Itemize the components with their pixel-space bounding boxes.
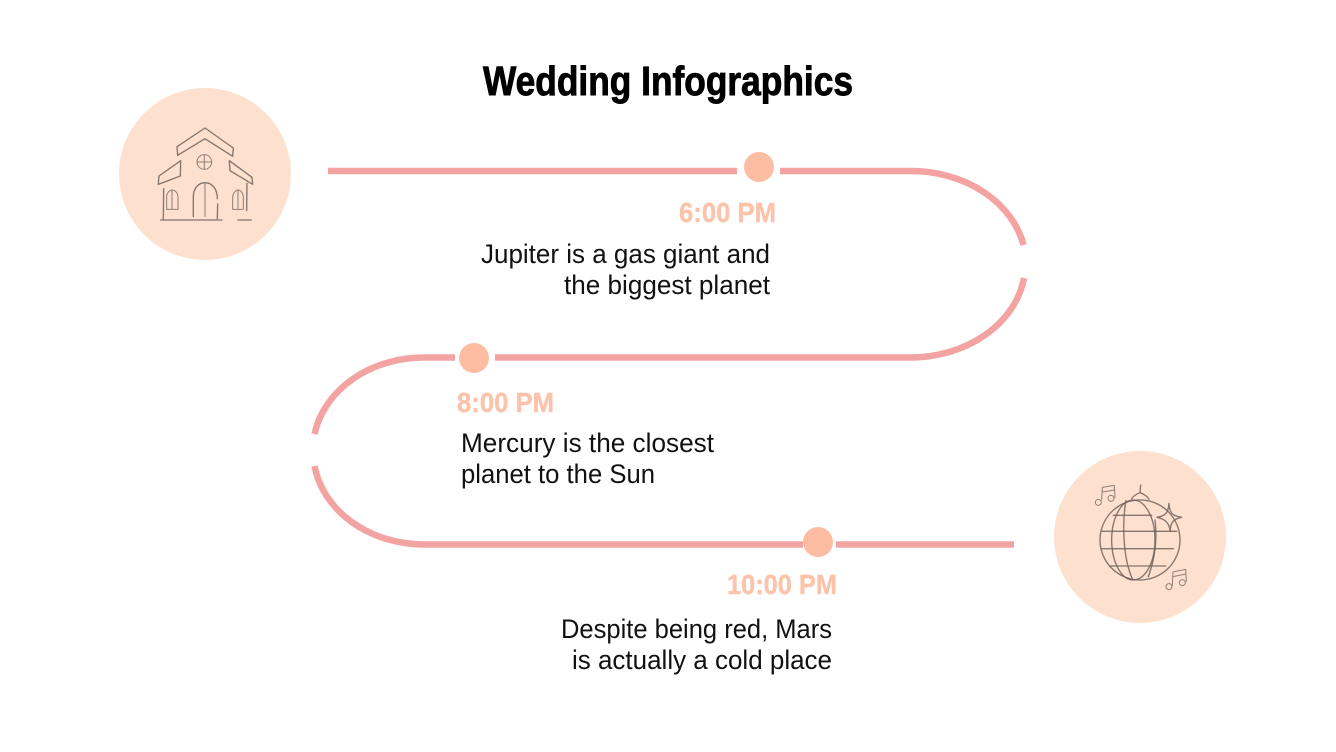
timeline dot: 6:00 PM xyxy=(744,152,774,182)
text: Mars: is actually a cold place xyxy=(572,645,832,675)
text: Mercury: planet to the Sun xyxy=(461,459,655,489)
icon: disco ball xyxy=(1054,451,1226,623)
text: Jupiter: the biggest planet xyxy=(564,270,771,300)
timeline dot: 8:00 PM xyxy=(459,343,489,373)
text: Mercury xyxy=(461,428,715,489)
text: Mars xyxy=(561,614,832,675)
time: 8:00 PM: 8:00 PM xyxy=(457,387,554,418)
timeline dot: 10:00 PM xyxy=(803,527,833,557)
time: 6:00 PM: 6:00 PM xyxy=(679,197,776,228)
text: Mercury: Mercury is the closest xyxy=(461,428,715,458)
title: Wedding Infographics xyxy=(483,58,853,104)
text: Jupiter: Jupiter is a gas giant and xyxy=(481,239,770,269)
timeline path xyxy=(314,171,1024,545)
time: 10:00 PM: 10:00 PM xyxy=(727,569,837,600)
text: Jupiter xyxy=(481,239,771,300)
icon: church xyxy=(119,88,291,260)
text: Mars: Despite being red, Mars xyxy=(561,614,832,644)
